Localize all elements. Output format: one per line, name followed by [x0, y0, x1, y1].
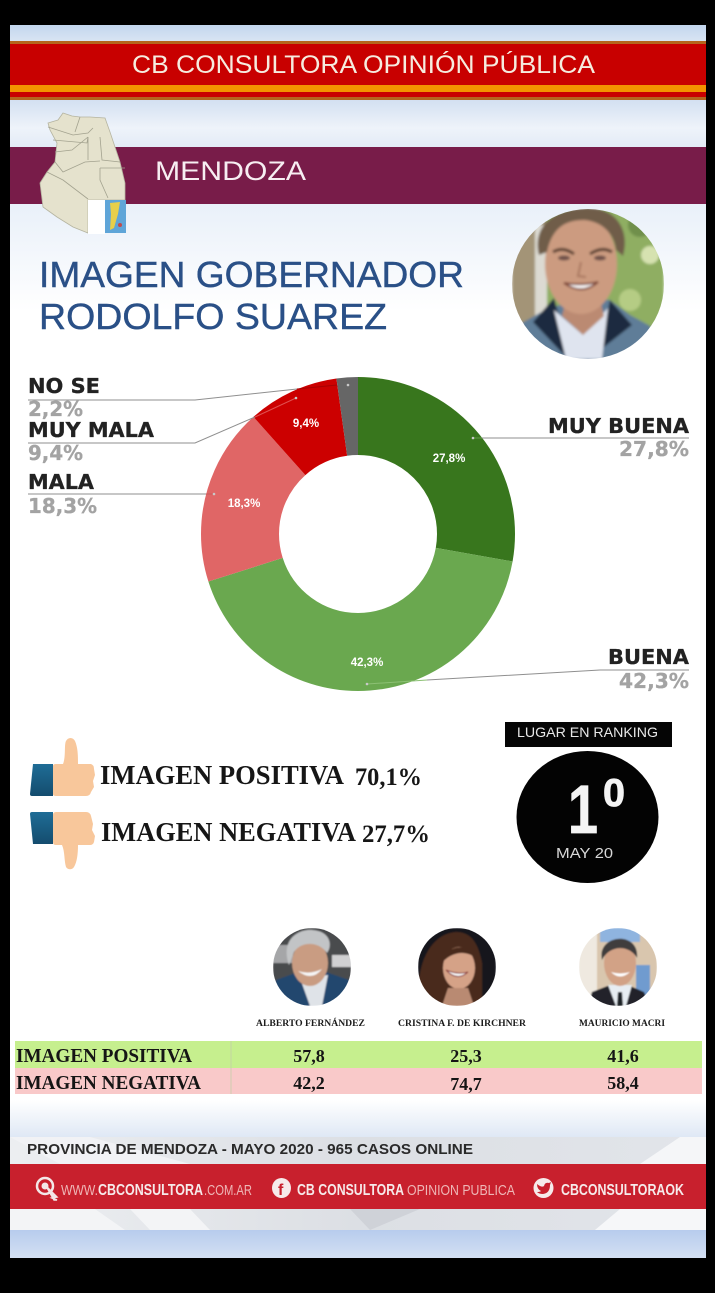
ranking label: LUGAR EN RANKING: [517, 724, 658, 740]
donut labels: [28, 374, 690, 693]
comparison table: 57,8: [293, 1046, 325, 1066]
ranking badge: MAY 20: [556, 846, 613, 862]
comparison table: 25,3: [450, 1046, 482, 1066]
comparison table: IMAGEN NEGATIVA: [16, 1072, 202, 1094]
positive image text: 70,1%: [355, 764, 422, 791]
footer banner: WWW.: [61, 1182, 98, 1199]
icon: cursor web: [37, 1178, 57, 1200]
donut labels: MUY BUENA: [548, 414, 690, 438]
icon: thumb up: [30, 738, 95, 796]
donut labels: MUY MALA: [28, 418, 155, 442]
province banner: MENDOZA: [155, 156, 306, 186]
header banner: [10, 41, 706, 100]
icon: Mendoza province map: [40, 113, 126, 234]
donut labels: 18,3%: [28, 494, 97, 518]
footer banner: CB CONSULTORA: [297, 1182, 404, 1199]
ranking badge: 1: [568, 771, 598, 848]
comparison table: 58,4: [607, 1073, 639, 1093]
donut chart: [28, 384, 689, 685]
portrait: Cristina F. de Kirchner: [418, 928, 496, 1006]
portrait: Rodolfo Suarez: [510, 208, 664, 361]
donut chart: 18,3%: [228, 498, 260, 510]
title: IMAGEN GOBERNADOR: [39, 254, 464, 295]
donut labels: MALA: [28, 470, 95, 494]
footer banner: CBCONSULTORAOK: [561, 1182, 684, 1199]
candidate names: CRISTINA F. DE KIRCHNER: [398, 1019, 526, 1029]
donut labels: 42,3%: [619, 669, 689, 693]
icon: twitter: [534, 1178, 554, 1198]
positive image text: IMAGEN POSITIVA: [100, 760, 344, 790]
footer banner: CBCONSULTORA: [98, 1182, 203, 1199]
footer banner: .COM.AR: [204, 1182, 252, 1199]
icon: thumb down: [30, 812, 95, 869]
donut labels: 2,2%: [28, 397, 83, 421]
icon: facebook: [272, 1178, 291, 1199]
negative image text: IMAGEN NEGATIVA: [101, 817, 356, 847]
candidate names: ALBERTO FERNÁNDEZ: [256, 1017, 365, 1029]
donut labels: 9,4%: [28, 441, 83, 465]
donut labels: 27,8%: [619, 437, 689, 461]
title: RODOLFO SUAREZ: [39, 296, 387, 337]
comparison table: IMAGEN POSITIVA: [16, 1045, 193, 1067]
donut labels: NO SE: [28, 374, 100, 398]
portrait: Alberto Fernández: [273, 928, 352, 1006]
footer banner: [10, 1164, 706, 1209]
donut chart: 9,4%: [293, 418, 319, 430]
donut chart: 27,8%: [433, 453, 465, 465]
comparison table: 42,2: [293, 1073, 325, 1093]
ranking label: [505, 722, 672, 747]
comparison table: 74,7: [450, 1074, 482, 1094]
candidate names: [256, 1017, 665, 1029]
icon: facebook: f: [278, 1182, 284, 1199]
comparison table: 41,6: [607, 1046, 639, 1066]
donut chart: 42,3%: [351, 657, 383, 669]
candidate names: MAURICIO MACRI: [579, 1019, 665, 1029]
portrait: Mauricio Macri: [579, 928, 657, 1006]
footer banner: OPINION PUBLICA: [407, 1182, 515, 1199]
negative image text: 27,7%: [362, 821, 430, 848]
header banner: CB CONSULTORA OPINIÓN PÚBLICA: [132, 50, 595, 79]
survey note: PROVINCIA DE MENDOZA - MAYO 2020 - 965 CASOS ONLINE: [27, 1141, 473, 1158]
ranking badge: [516, 751, 658, 883]
ranking badge: 0: [603, 772, 625, 815]
comparison table: [15, 1041, 702, 1094]
province banner: [10, 147, 706, 204]
title: [39, 254, 464, 337]
donut labels: BUENA: [608, 645, 690, 669]
